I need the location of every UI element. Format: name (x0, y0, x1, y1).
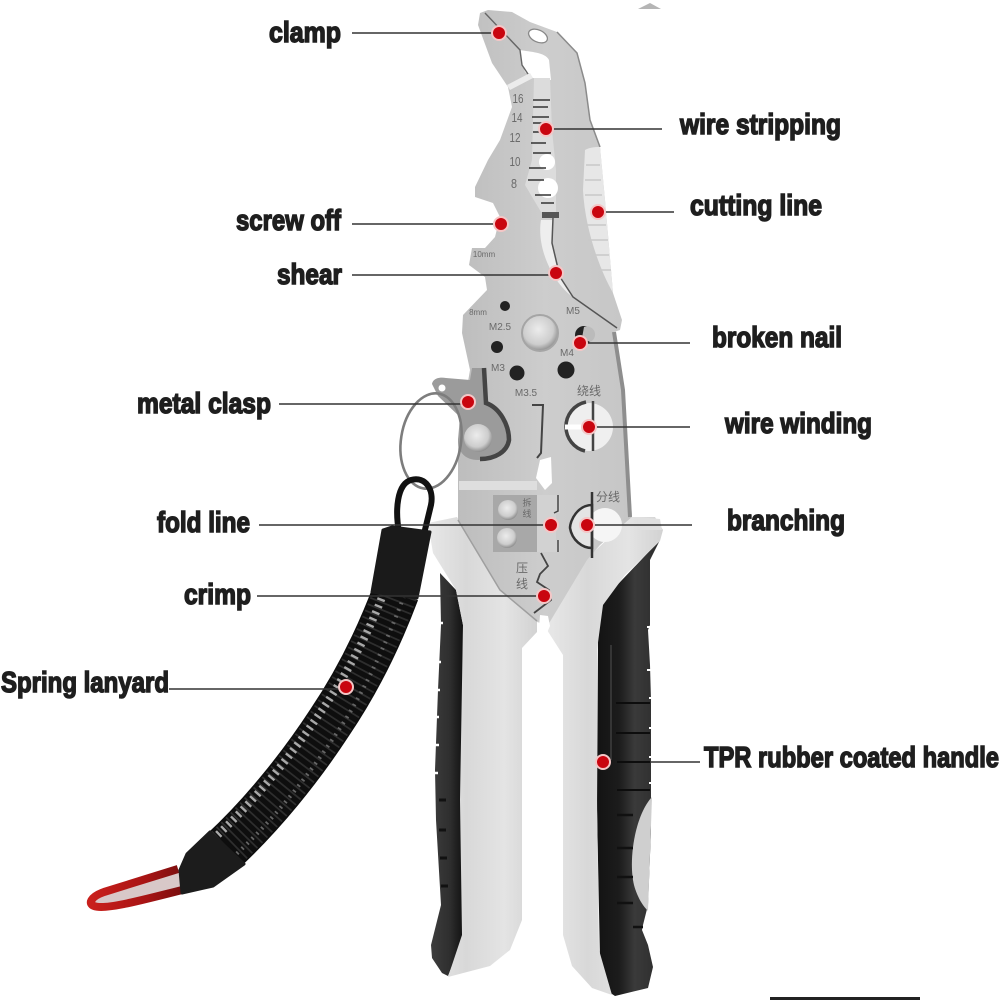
stripper ladder (528, 100, 554, 203)
left grip notches (432, 623, 443, 773)
bottom sleeve (180, 832, 244, 893)
screw holes (500, 301, 510, 311)
plate rivets (498, 500, 518, 520)
shear blade seam (552, 218, 617, 328)
callout: fold line: fold line (157, 507, 250, 539)
lever rivet (464, 424, 492, 452)
callout: clamp: clamp (269, 17, 341, 49)
fold line blade (537, 495, 560, 552)
center notch (536, 457, 552, 490)
jaw bright edge (507, 73, 533, 90)
left handle black grip (431, 573, 463, 976)
jaw oval hole (526, 26, 550, 46)
lever dark rim (480, 368, 509, 459)
right rim (614, 332, 630, 517)
gauge numbers: M3.5 (515, 388, 538, 399)
steel head (458, 10, 632, 625)
right jaw outer edge (557, 32, 600, 147)
fragment: top edge mark (638, 3, 661, 9)
left handle white body (428, 517, 537, 977)
stripper dark block (542, 212, 559, 218)
coil ribs (222, 592, 396, 852)
gauge numbers: 8mm (469, 308, 487, 317)
jaw opening (520, 50, 551, 80)
gauge numbers: 10 (510, 154, 520, 169)
stripper holes (539, 154, 555, 170)
callout: broken nail: broken nail (712, 322, 842, 354)
illustration: wire pliers (394, 10, 663, 996)
callout: shear: shear (277, 259, 342, 291)
callout: metal clasp: metal clasp (137, 388, 271, 420)
cutting edge serration (583, 147, 613, 293)
gauge numbers: 10mm (473, 250, 495, 259)
gauge numbers: 16 (512, 91, 524, 106)
right handle white thumb inset (632, 797, 652, 911)
left grip dots (439, 800, 448, 886)
gauge numbers: M2.5 (489, 322, 512, 333)
gauge numbers: 线 (516, 577, 528, 591)
fragment: bottom edge bar (770, 997, 920, 1000)
wedge shadow (458, 520, 537, 621)
center slot (532, 405, 543, 458)
callout: screw off: screw off (236, 205, 341, 237)
coil faint highlights (232, 596, 404, 858)
callout: spring lanyard: Spring lanyard (1, 667, 169, 699)
plate label: 拆 (522, 497, 532, 508)
right handle grip ridges (616, 703, 650, 790)
right grip lower ribs (617, 815, 643, 927)
lever clasp (432, 368, 510, 460)
carabiner (91, 869, 182, 907)
fold line plate (493, 495, 538, 552)
fold line plate edge (554, 495, 558, 552)
gauge numbers: 压 (516, 561, 528, 575)
crimp teeth (534, 553, 551, 613)
marker dots (339, 26, 610, 769)
gauge numbers: 绕线 (577, 384, 601, 398)
gauge numbers: 12 (510, 130, 520, 145)
illustration: wire pliers: 线 (522, 508, 532, 519)
gauge numbers: 14 (512, 110, 522, 125)
coil body (222, 592, 396, 852)
gauge numbers: M5 (566, 306, 580, 317)
gauge numbers: 8 (511, 176, 517, 191)
key ring (394, 389, 468, 493)
lever hole (438, 384, 446, 392)
right handle white body (547, 517, 663, 995)
jaw seam (485, 13, 530, 77)
branching cut (588, 508, 622, 542)
wire stripper bright band (525, 78, 556, 212)
gauge numbers: M4 (560, 348, 574, 359)
gauge numbers: M3 (491, 363, 505, 374)
light band (459, 481, 537, 490)
callout: wire stripping: wire stripping (679, 109, 841, 141)
callout: crimp: crimp (184, 579, 251, 611)
winding arcs (566, 402, 586, 451)
top sleeve (372, 527, 430, 598)
winding cut circle (565, 403, 613, 451)
winding slit (565, 424, 590, 430)
callout: wire winding: wire winding (724, 408, 872, 440)
central pivot rivet (522, 315, 558, 351)
right handle black grip (597, 540, 660, 996)
gauge numbers (469, 91, 620, 591)
shear blade white (540, 220, 573, 297)
right grip notches (647, 627, 654, 783)
jaw gap (539, 615, 550, 635)
loop (397, 479, 432, 534)
coil highlights (210, 592, 384, 842)
lanyard (91, 479, 432, 907)
gauge numbers: 分线 (596, 490, 620, 504)
right grip channel (610, 645, 612, 760)
callout: branching: branching (727, 505, 845, 537)
callout: cutting line: cutting line (690, 190, 822, 222)
serration marks (585, 165, 611, 270)
